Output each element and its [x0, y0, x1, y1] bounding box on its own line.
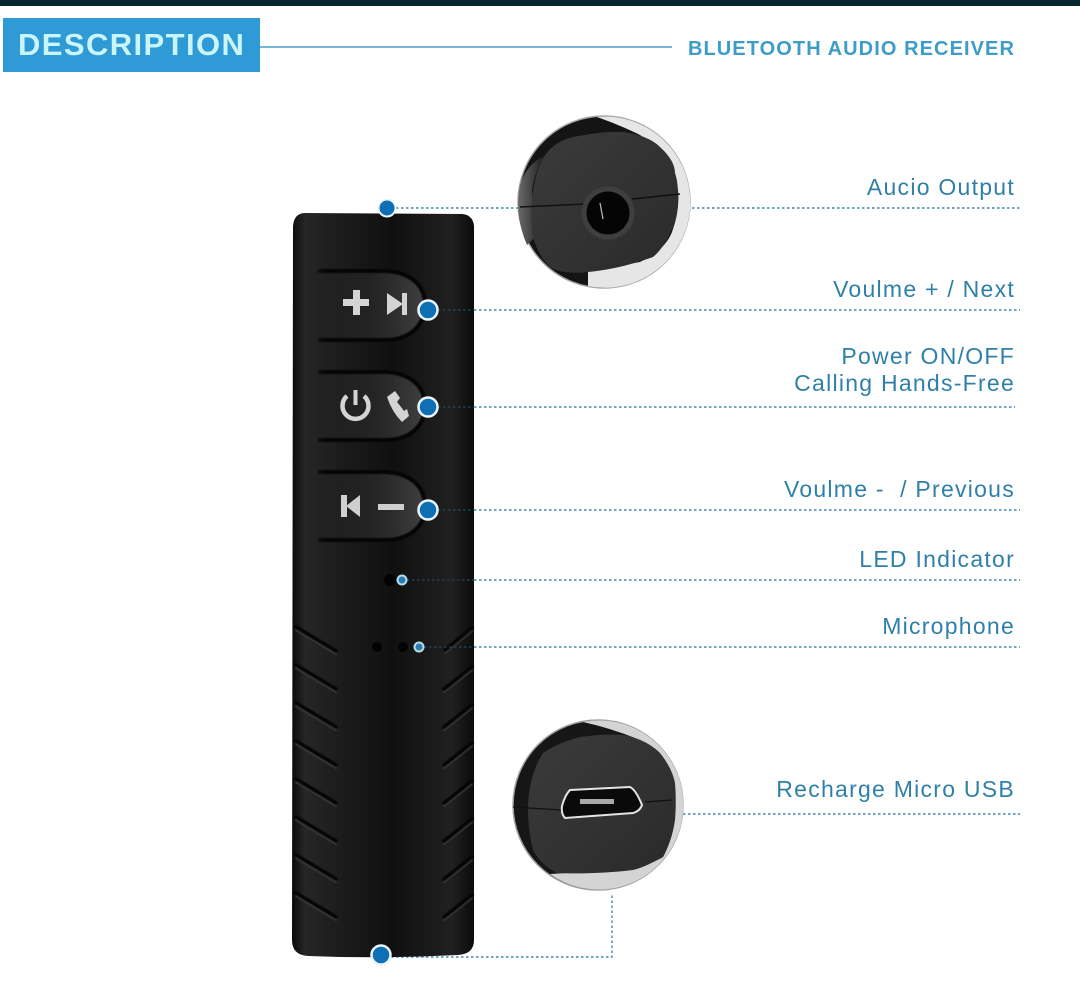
- label: LED indicator: LED Indicator: [859, 546, 1015, 572]
- label: volume down: Voulme - / Previous: [784, 476, 1015, 502]
- label: power and calling: Calling Hands-Free: [794, 370, 1015, 396]
- label: power and calling: [794, 343, 1015, 396]
- label: audio output: Aucio Output: [867, 174, 1015, 200]
- inset: audio output jack: [518, 116, 690, 288]
- dim leader lines over body: [407, 310, 474, 647]
- LED and microphone holes: [372, 574, 408, 652]
- header: description badge: DESCRIPTION: [18, 27, 245, 62]
- white highlights: [550, 721, 683, 890]
- white highlights: [588, 117, 690, 288]
- inset: micro USB port: [513, 720, 683, 890]
- label: recharge micro USB: Recharge Micro USB: [776, 776, 1015, 802]
- grip ridges: [296, 627, 472, 920]
- jack face: [531, 132, 678, 273]
- marker dots: [372, 200, 438, 964]
- button: volume up / next: [318, 271, 425, 340]
- label: microphone: Microphone: [882, 613, 1015, 639]
- button: volume down / previous: [318, 472, 425, 540]
- header subtitle: BLUETOOTH AUDIO RECEIVER: [688, 38, 1015, 60]
- device body: [292, 213, 474, 957]
- header rule: [260, 46, 672, 48]
- button: power / call: [318, 372, 425, 440]
- label: volume up: Voulme + / Next: [833, 276, 1015, 302]
- left grey edge: [518, 155, 545, 245]
- port face: [528, 735, 676, 873]
- label: power and calling: Power ON/OFF: [841, 343, 1015, 369]
- header: description badge: [3, 18, 260, 72]
- top bar: [0, 0, 1080, 6]
- leader lines: [391, 208, 1020, 957]
